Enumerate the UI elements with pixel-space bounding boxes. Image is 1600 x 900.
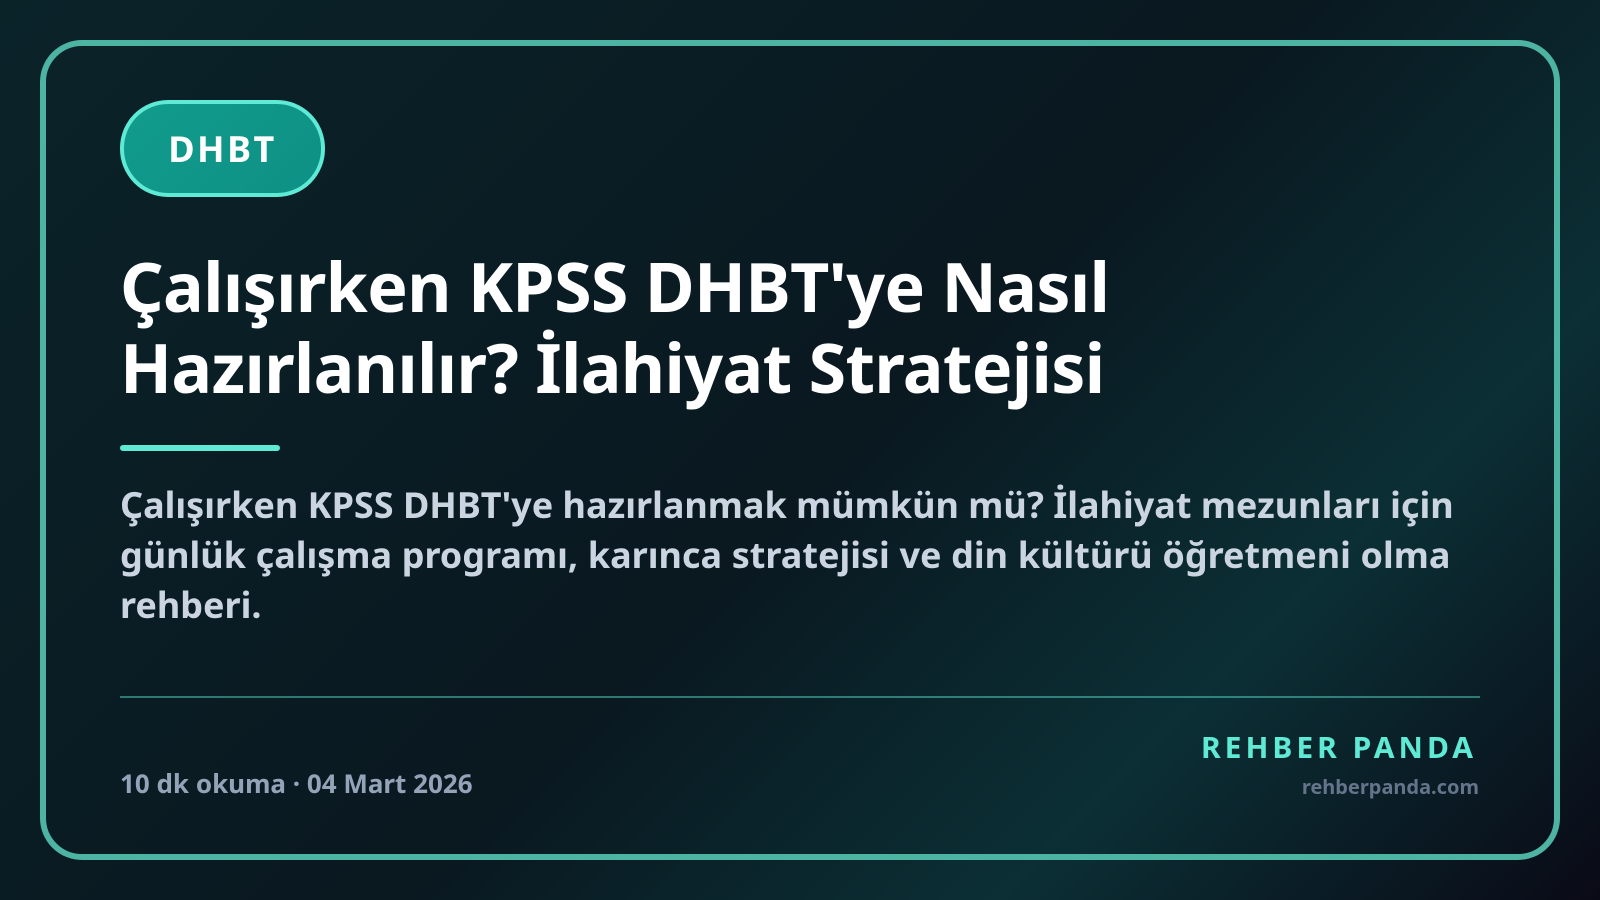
title: Çalışırken KPSS DHBT'ye Nasıl: [120, 239, 1109, 332]
description: rehberi.: [120, 580, 261, 629]
brand name: REHBER PANDA: [1201, 726, 1477, 767]
description: [120, 480, 1454, 629]
accent rule: [120, 445, 280, 451]
badge: DHBT: [120, 100, 325, 197]
title: [120, 239, 1109, 413]
badge: DHBT: DHBT: [168, 124, 277, 173]
footer divider: [120, 696, 1480, 698]
title: Hazırlanılır? İlahiyat Stratejisi: [120, 320, 1104, 413]
website url: rehberpanda.com: [1302, 773, 1479, 800]
description: Çalışırken KPSS DHBT'ye hazırlanmak mümkün mü? İlahiyat mezunları için: [120, 480, 1454, 529]
description: günlük çalışma programı, karınca stratejisi ve din kültürü öğretmeni olma: [120, 530, 1450, 579]
reading time and date: 10 dk okuma · 04 Mart 2026: [120, 765, 473, 801]
